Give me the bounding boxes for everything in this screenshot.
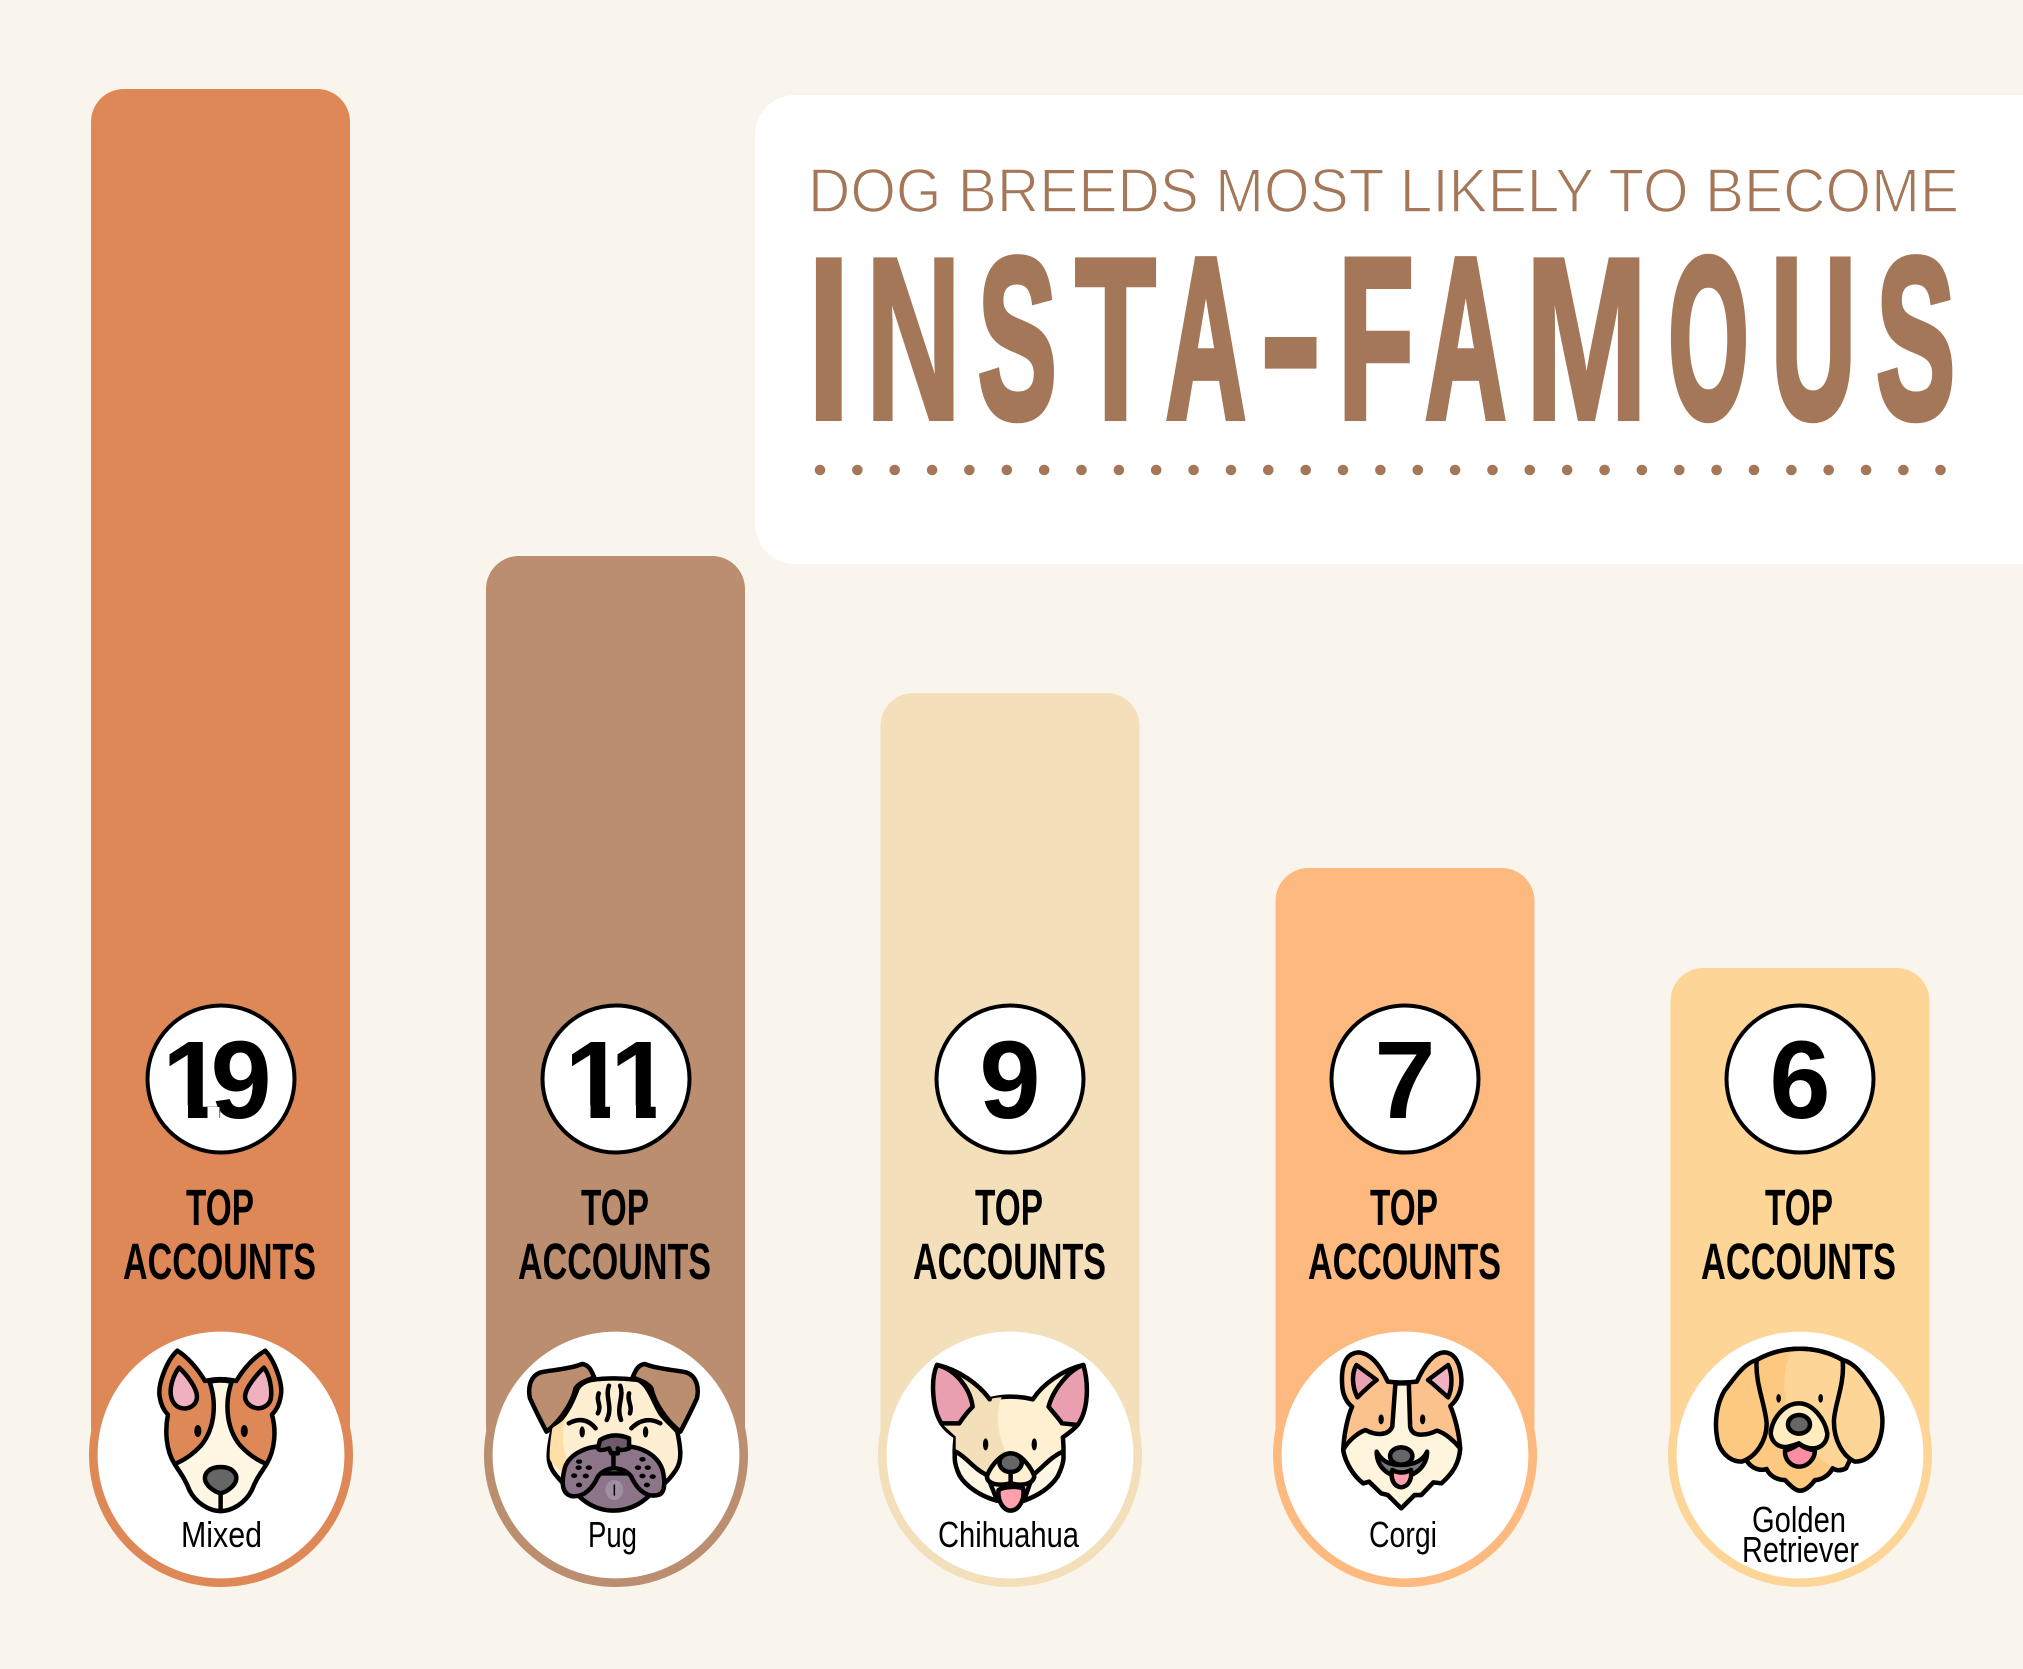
badge ring: Mixed [93, 1327, 349, 1583]
value: 11: 11 [564, 1019, 671, 1142]
main heading: - [1259, 204, 1322, 463]
value: 6 [1726, 1006, 1874, 1152]
label: top accounts: ACCOUNTS [913, 1233, 1106, 1290]
badge ring: Corgi [1277, 1327, 1533, 1583]
bar: Golden Retriever [1670, 968, 1930, 1459]
breed name: Golden Retriever [1742, 1499, 1859, 1570]
value: 11 [542, 1006, 690, 1152]
dotted divider [815, 465, 1946, 475]
label: top accounts: TOP [581, 1179, 649, 1236]
value: 6: 6 [1769, 1019, 1831, 1142]
column: Chihuahua [880, 693, 1140, 1583]
column: Mixed [91, 89, 350, 1583]
value: 19 [148, 1006, 294, 1152]
value: 9: 9 [979, 1019, 1041, 1142]
main heading: A [1426, 212, 1506, 466]
main heading: O [1668, 212, 1748, 466]
label: top accounts [1308, 1179, 1501, 1290]
bar: Mixed [91, 89, 350, 1459]
subtitle: DOG BREEDS MOST LIKELY TO BECOME [808, 157, 1959, 226]
column: Golden Retriever [1670, 968, 1930, 1583]
column: Pug [486, 556, 745, 1583]
icon: pug [529, 1364, 698, 1511]
badge ring: Golden Retriever [1672, 1327, 1928, 1583]
label: top accounts: TOP [975, 1179, 1043, 1236]
label: top accounts: TOP [1370, 1179, 1438, 1236]
breed name: Corgi: Corgi [1369, 1514, 1437, 1555]
value: 9 [936, 1006, 1084, 1152]
label: top accounts: TOP [1765, 1179, 1833, 1236]
icon: golden retriever [1716, 1349, 1882, 1491]
label: top accounts [913, 1179, 1106, 1290]
badge ring: Chihuahua [882, 1327, 1138, 1583]
bar: Chihuahua [880, 693, 1140, 1459]
icon: chihuahua [933, 1365, 1087, 1511]
breed name: Golden Retriever: Golden [1752, 1499, 1846, 1540]
value: 19: 19 [162, 1019, 272, 1142]
title panel [755, 95, 2023, 564]
bar: Corgi [1276, 868, 1534, 1459]
icon: corgi [1342, 1352, 1461, 1508]
main heading: I [807, 210, 851, 469]
main heading: M [1525, 210, 1648, 469]
main heading: S [978, 210, 1057, 466]
label: top accounts [518, 1179, 711, 1290]
label: top accounts: ACCOUNTS [1701, 1233, 1896, 1290]
column: Corgi [1276, 868, 1534, 1583]
label: top accounts: ACCOUNTS [1308, 1233, 1501, 1290]
breed name: Chihuahua: Chihuahua [938, 1514, 1080, 1555]
main heading: N [866, 210, 961, 469]
label: top accounts: ACCOUNTS [123, 1233, 316, 1290]
main heading: U [1771, 210, 1856, 466]
label: top accounts: TOP [186, 1179, 254, 1236]
value: 7: 7 [1374, 1019, 1436, 1142]
label: top accounts [1701, 1179, 1896, 1290]
main heading: F [1338, 210, 1414, 466]
breed name: Pug: Pug [588, 1514, 637, 1555]
breed name: Golden Retriever: Retriever [1742, 1529, 1859, 1570]
icon: mixed breed dog [159, 1351, 281, 1511]
bar: Pug [486, 556, 745, 1459]
main heading: A [1166, 212, 1246, 466]
label: top accounts: ACCOUNTS [518, 1233, 711, 1290]
main heading: T [1075, 210, 1156, 469]
breed name: Mixed: Mixed [181, 1514, 262, 1555]
badge ring: Pug [488, 1327, 744, 1583]
label: top accounts [123, 1179, 316, 1290]
value: 7 [1332, 1006, 1478, 1152]
